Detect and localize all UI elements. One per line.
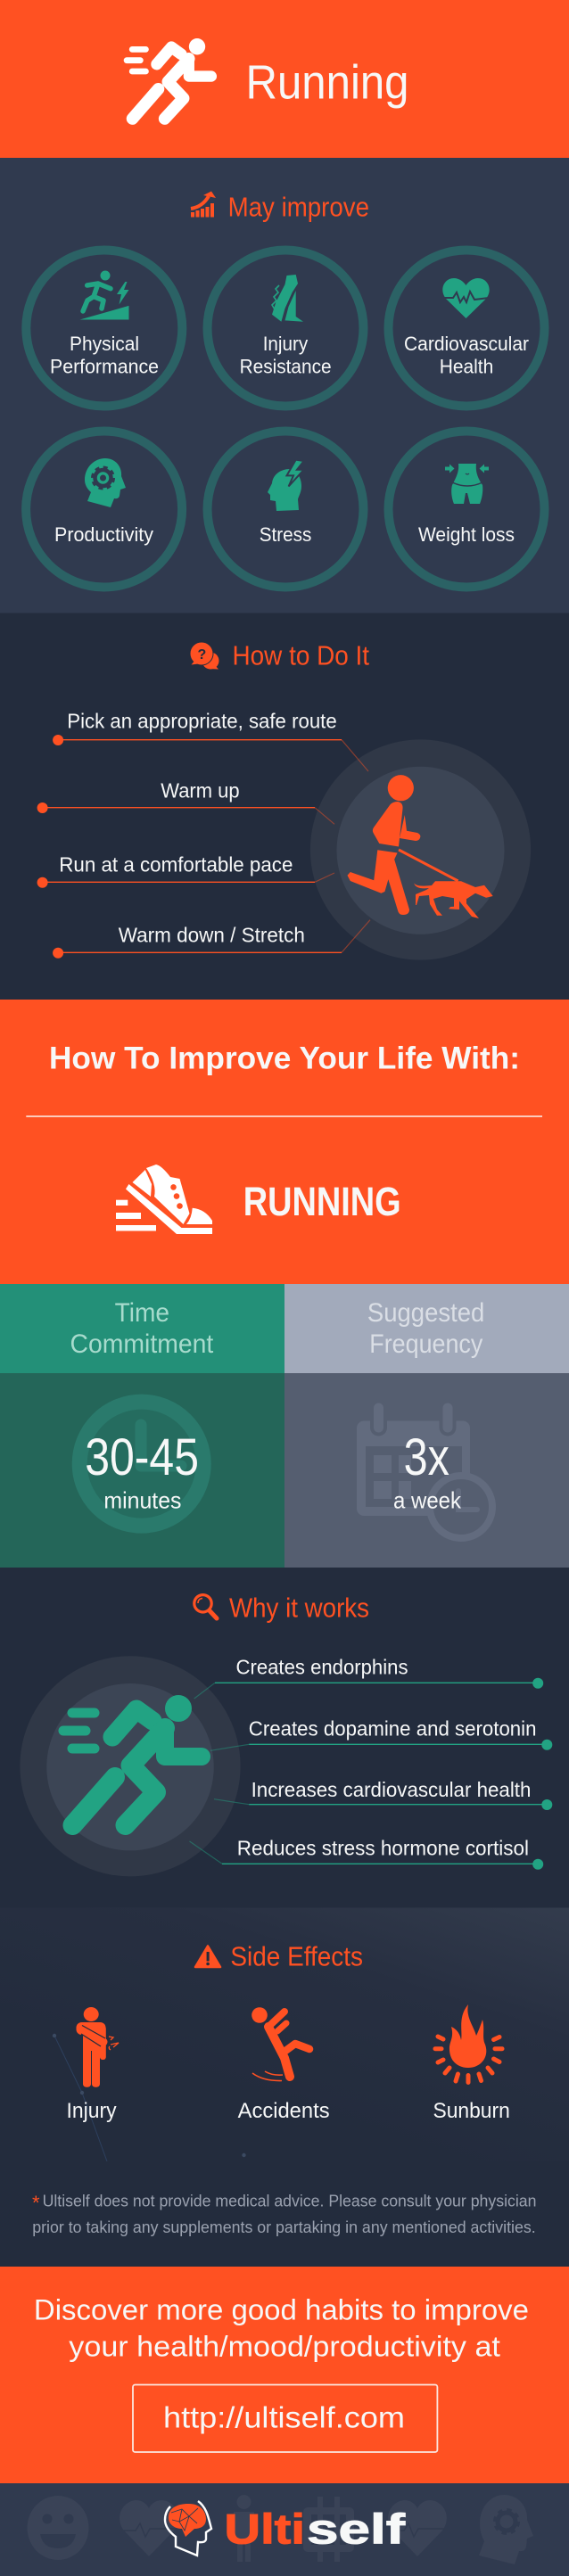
reason: endorphins: Creates endorphins: [235, 1656, 408, 1679]
disclaimer: Ultiself does not provide medical advice. Please consult your physician: [43, 2192, 537, 2210]
step: run: Run at a comfortable pace: [59, 852, 293, 876]
icon: warning triangle: [195, 1946, 220, 1967]
heading: how to improve: How To Improve Your Life With:: [49, 1041, 520, 1075]
effect: accidents: Accidents: [238, 2099, 330, 2123]
panel: call to action: your health/mood/productivity at: [69, 2331, 500, 2363]
panel: header: [0, 0, 569, 158]
panel: time commitment: 30-45: [85, 1428, 199, 1486]
concentric circles: [310, 739, 531, 960]
panel: call to action: [0, 2267, 569, 2483]
step: pick a route: [53, 710, 368, 771]
panel: time commitment: [0, 1284, 284, 1568]
icon: uphill runner: [80, 271, 128, 319]
heading: how to do it: How to Do It: [232, 640, 369, 671]
reason: dopamine: Creates dopamine and serotonin: [249, 1717, 537, 1741]
icon: head with gear: [85, 458, 126, 507]
text: discover more: Discover more good habits to improve: [34, 2294, 529, 2326]
heading: why it works: Why it works: [229, 1592, 369, 1623]
step: pick a route: Pick an appropriate, safe route: [67, 710, 337, 733]
panel: suggested frequency: [284, 1284, 569, 1568]
disclaimer: [0, 2161, 569, 2267]
benefit: injury resistance: Injury: [263, 333, 308, 355]
benefit: physical performance: [26, 250, 182, 407]
panel: why it works: [0, 1568, 569, 1908]
icon: question bubbles: [190, 642, 219, 669]
label: running: RUNNING: [243, 1179, 401, 1224]
benefit: weight loss: Weight loss: [418, 523, 515, 546]
panel: suggested frequency: Frequency: [369, 1329, 482, 1359]
panel: suggested frequency: a week: [393, 1486, 462, 1513]
benefit: productivity: Productivity: [54, 523, 153, 546]
benefit: injury resistance: Resistance: [240, 355, 332, 377]
background icons: [27, 2495, 533, 2564]
benefit: cardiovascular health: Health: [440, 355, 493, 377]
icon: sun flame: [435, 2004, 502, 2083]
logo: [165, 2501, 405, 2555]
panel: suggested frequency: 3x: [404, 1428, 449, 1486]
reason: cortisol: Reduces stress hormone cortisol: [237, 1837, 529, 1860]
wordmark: Ulti: [225, 2506, 305, 2553]
reason: cortisol: [189, 1837, 543, 1870]
icon: person running with dog: [348, 775, 493, 918]
step: warm up: [37, 778, 334, 824]
icon: slipping person: [252, 2007, 309, 2081]
icon: magnifier: [194, 1595, 217, 1618]
panel: footer: [0, 2483, 569, 2576]
panel: side effects: [0, 1908, 569, 2161]
icon: head with lightning: [268, 460, 304, 511]
effect: accidents: [238, 2007, 330, 2123]
disclaimer: prior to taking any supplements or partaking in any mentioned activities.: [32, 2218, 536, 2236]
icon: rising chart: [191, 191, 216, 218]
step: warm up: Warm up: [161, 778, 240, 802]
title: Running: [246, 56, 408, 110]
panel: how to do it: [0, 613, 569, 1000]
benefit: stress: Stress: [260, 523, 311, 546]
benefit: productivity: [26, 432, 182, 587]
icon: waist: [445, 464, 489, 504]
effect: sunburn: Sunburn: [433, 2099, 510, 2123]
reason: cardiovascular: [214, 1778, 552, 1810]
benefit: stress: [207, 432, 364, 587]
panel: how to improve your life: [0, 1000, 569, 1284]
benefit: cardiovascular health: [389, 250, 544, 407]
reason: cardiovascular: Increases cardiovascular health: [252, 1778, 531, 1801]
icon: heart with pulse: [442, 278, 490, 318]
icon: running man: [127, 38, 211, 119]
button: url: [133, 2384, 437, 2452]
benefit: physical performance: Physical: [70, 333, 139, 355]
icon: question bubbles: ?: [198, 647, 206, 663]
benefit: physical performance: Performance: [50, 355, 159, 377]
panel: may improve: [0, 158, 569, 613]
benefit: cardiovascular health: Cardiovascular: [404, 333, 529, 355]
step: run: [37, 852, 334, 888]
disclaimer: *: [32, 2192, 40, 2214]
icon: legs: [272, 275, 303, 322]
button: url: http://ultiself.com: [163, 2401, 405, 2434]
step: warm down: [53, 920, 370, 959]
icon: calendar watermark: [357, 1408, 492, 1538]
icon: clock watermark: [79, 1402, 203, 1526]
concentric circles: [20, 1656, 241, 1876]
icon: hurt arm person: [77, 2007, 119, 2087]
panel: time commitment: Time: [115, 1298, 169, 1328]
icon: brain head: [165, 2501, 211, 2555]
icon: running man teal: [63, 1695, 202, 1825]
effect: sunburn: [433, 2004, 510, 2123]
benefit: injury resistance: [207, 250, 364, 407]
step: warm down: Warm down / Stretch: [119, 924, 305, 947]
panel: suggested frequency: Suggested: [367, 1298, 484, 1328]
reason: dopamine: [210, 1717, 552, 1750]
heading: side effects: Side Effects: [230, 1940, 363, 1971]
reason: endorphins: [194, 1656, 543, 1699]
panel: time commitment: minutes: [103, 1486, 182, 1513]
effect: injury: Injury: [66, 2099, 117, 2123]
benefit: weight loss: [389, 432, 544, 587]
logo: self: [307, 2506, 405, 2553]
icon: running shoe: [116, 1165, 212, 1234]
effect: injury: [66, 2007, 119, 2123]
panel: time commitment: Commitment: [70, 1329, 214, 1359]
heading: may improve: May improve: [228, 191, 369, 222]
